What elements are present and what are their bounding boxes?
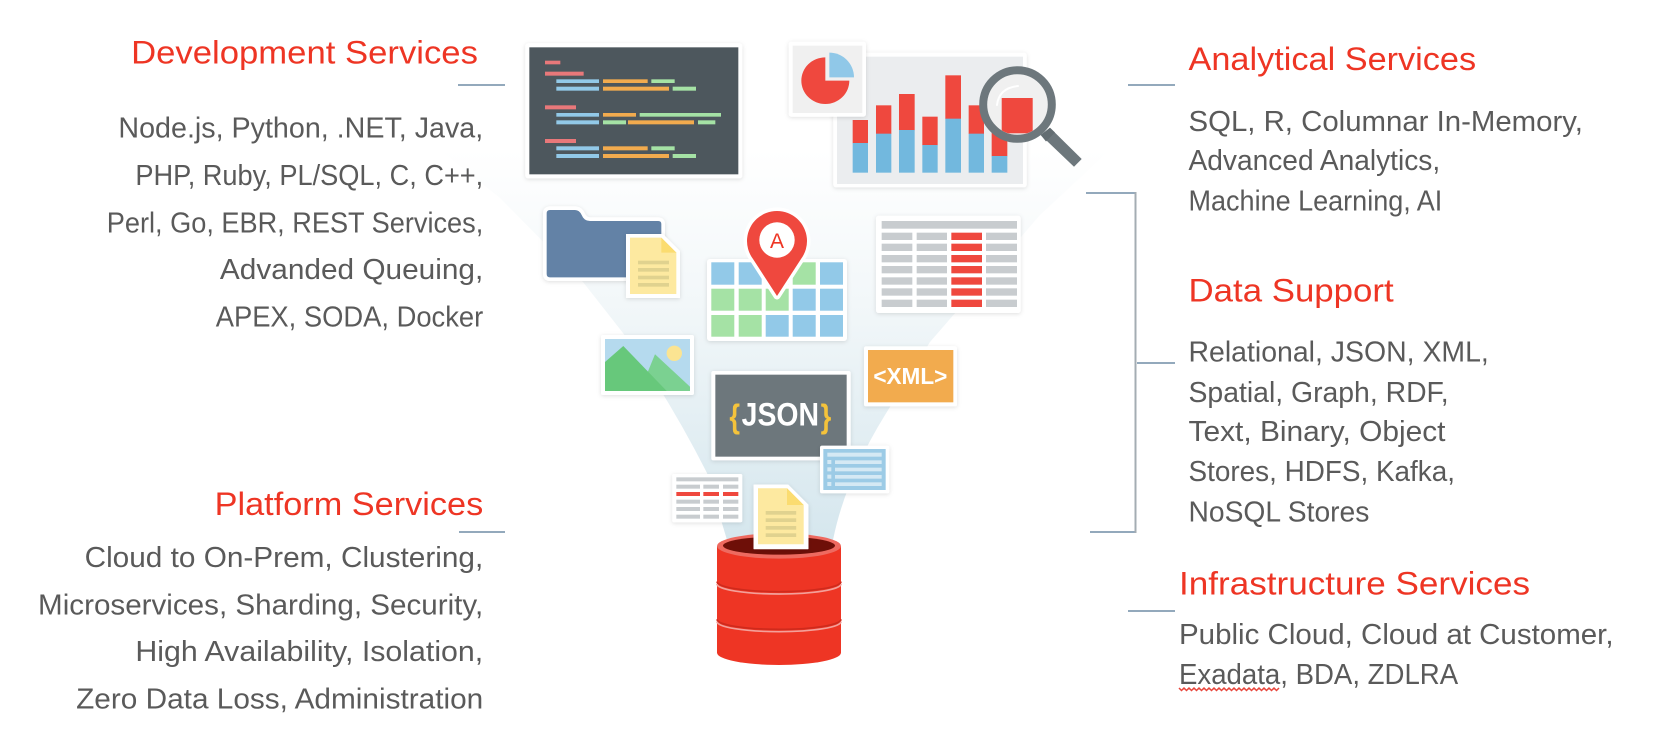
text: infrastructure services list: Public Cloud, Cloud at Customer, — [1179, 619, 1614, 651]
text: analytical services list: Advanced Analytics, — [1189, 145, 1440, 177]
icon: small table — [672, 474, 742, 522]
text: data support list: Text, Binary, Object — [1189, 416, 1446, 448]
text: data support list: Relational, JSON, XML, — [1189, 337, 1489, 369]
text: infrastructure services list: Exadata, BDA, ZDLRA — [1179, 659, 1458, 691]
icon: folder with document — [547, 210, 680, 298]
icon: magnifying glass — [983, 70, 1082, 167]
icon: map pin: A — [770, 230, 784, 253]
panel: infrastructure services text — [1179, 564, 1614, 691]
icon: JSON block: } — [821, 398, 831, 435]
text: analytical services list: SQL, R, Columnar In-Memory, — [1189, 106, 1583, 138]
text: analytical services list — [1189, 106, 1583, 217]
panel: analytical services text — [1189, 40, 1583, 217]
icon: document entering database — [754, 485, 808, 549]
icon: map pin — [747, 211, 807, 296]
heading: platform services: Platform Services — [215, 485, 483, 522]
text: data support list: Stores, HDFS, Kafka, — [1189, 456, 1455, 488]
text: platform services list — [38, 542, 483, 715]
text: development services list: Perl, Go, EBR, REST Services, — [107, 208, 483, 240]
text: data support list — [1189, 337, 1489, 528]
icon: landscape image — [601, 335, 694, 395]
text: development services list: Advanded Queuing, — [220, 254, 483, 286]
heading: infrastructure services: Infrastructure Services — [1179, 564, 1530, 601]
heading: analytical services: Analytical Services — [1189, 40, 1476, 77]
text: platform services list: Cloud to On-Prem, Clustering, — [85, 542, 483, 574]
text: infrastructure services list — [1179, 619, 1614, 691]
text: analytical services list: Machine Learning, AI — [1189, 185, 1442, 217]
icon: XML tag — [864, 346, 957, 406]
icon: bar chart — [833, 53, 1027, 187]
icon: JSON block: JSON — [742, 397, 819, 433]
text: platform services list: High Availability, Isolation, — [135, 636, 483, 668]
text: development services list: APEX, SODA, Docker — [216, 302, 484, 334]
funnel background — [440, 150, 1110, 540]
spell-check squiggle under Exadata — [1179, 688, 1279, 690]
panel: platform services text — [38, 485, 483, 715]
text: data support list: NoSQL Stores — [1189, 496, 1369, 528]
heading: data support: Data Support — [1189, 271, 1394, 308]
icon: JSON block — [711, 371, 851, 460]
heading: development services: Development Services — [131, 33, 478, 70]
text: data support list: Spatial, Graph, RDF, — [1189, 377, 1449, 409]
icon: pie chart — [789, 42, 866, 117]
text: development services list: Node.js, Python, .NET, Java, — [118, 112, 483, 144]
text: platform services list: Zero Data Loss, Administration — [76, 683, 483, 715]
icon: JSON block: { — [729, 398, 740, 435]
icon: database cylinder — [717, 533, 841, 665]
panel: development services text — [107, 33, 484, 334]
icon: code editor — [525, 43, 742, 178]
text: development services list: PHP, Ruby, PL/SQL, C, C++, — [135, 160, 483, 192]
panel: data support text — [1189, 271, 1489, 528]
connector lines — [458, 85, 1175, 611]
text: development services list — [107, 112, 484, 334]
icon: list panel — [820, 446, 889, 493]
icon: data table with red column — [876, 216, 1021, 313]
icon: map grid — [707, 259, 847, 341]
text: platform services list: Microservices, Sharding, Security, — [38, 589, 483, 621]
icon: XML tag: <XML> — [873, 363, 947, 389]
